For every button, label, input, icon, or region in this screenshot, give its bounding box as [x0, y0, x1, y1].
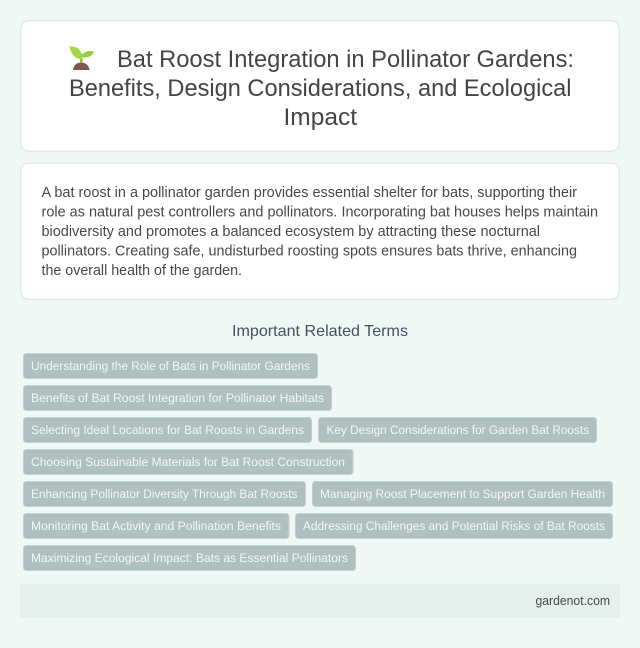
tag: materials: Choosing Sustainable Materials for Bat Roost Construction	[31, 455, 345, 469]
tag: understanding	[24, 354, 318, 378]
tag: benefits: Benefits of Bat Roost Integration for Pollinator Habitats	[31, 391, 324, 405]
heading: important related terms: Important Related Terms	[232, 323, 408, 340]
tag: diversity: Enhancing Pollinator Diversity Through Bat Roosts	[31, 487, 298, 501]
panel: title card	[21, 21, 619, 151]
title: Benefits, Design Considerations, and Ecological	[69, 75, 572, 102]
tag: diversity	[24, 482, 306, 506]
tag: ecological impact	[24, 546, 356, 570]
footer: gardenot.com	[536, 594, 610, 608]
description text: role as natural pest controllers and pollinators. Incorporating bat houses helps maintain	[42, 204, 598, 220]
description text: A bat roost in a pollinator garden provides essential shelter for bats, supporting their	[42, 185, 577, 201]
tag: placement: Managing Roost Placement to Support Garden Health	[320, 487, 605, 501]
tag: design	[318, 418, 596, 442]
footer	[20, 584, 620, 618]
tag: placement	[312, 482, 612, 506]
tag: challenges: Addressing Challenges and Potential Risks of Bat Roosts	[303, 519, 605, 533]
tag: locations	[24, 418, 312, 442]
description text	[42, 185, 598, 279]
title	[69, 46, 574, 131]
description text: biodiversity and promotes a balanced ecosystem by attracting these nocturnal	[42, 224, 540, 240]
title: Bat Roost Integration in Pollinator Gardens:	[117, 46, 574, 73]
term tags	[24, 354, 612, 570]
tag: understanding: Understanding the Role of Bats in Pollinator Gardens	[31, 359, 310, 373]
title: Impact	[284, 104, 357, 131]
tag: ecological impact: Maximizing Ecological Impact: Bats as Essential Pollinators	[31, 551, 348, 565]
tag: challenges	[296, 514, 612, 538]
panel: description card	[21, 163, 619, 299]
tag: materials	[24, 450, 353, 474]
tag: design: Key Design Considerations for Garden Bat Roosts	[326, 423, 589, 437]
icon: seedling	[70, 46, 94, 70]
description text: the overall health of the garden.	[42, 263, 242, 279]
tag: benefits	[24, 386, 332, 410]
tag: monitoring: Monitoring Bat Activity and Pollination Benefits	[31, 519, 281, 533]
description text: pollinators. Creating safe, undisturbed roosting spots ensures bats thrive, enhancing	[42, 244, 577, 260]
tag: locations: Selecting Ideal Locations for Bat Roosts in Gardens	[31, 423, 304, 437]
tag: monitoring	[24, 514, 289, 538]
